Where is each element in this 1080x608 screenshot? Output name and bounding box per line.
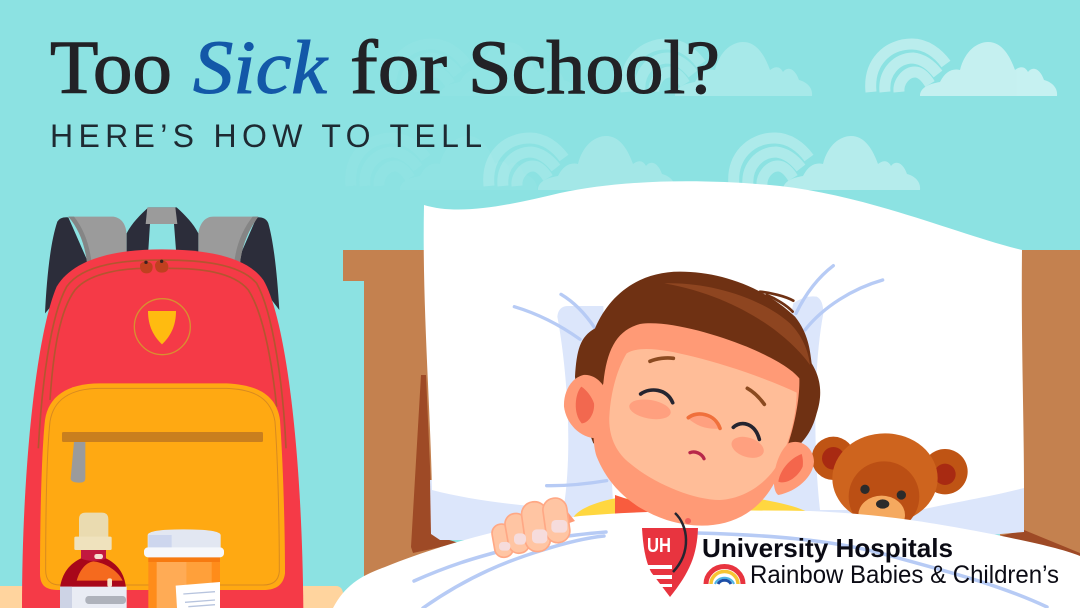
table — [0, 586, 343, 608]
hair highlight — [664, 283, 810, 365]
front pocket — [40, 383, 285, 590]
title: Sick — [193, 26, 328, 110]
left ear — [564, 375, 607, 438]
face — [594, 323, 799, 526]
mouth — [690, 452, 704, 459]
hair tuft — [760, 292, 793, 312]
backpack straps — [45, 207, 279, 313]
hair — [575, 272, 820, 450]
title: Too — [50, 26, 172, 110]
backpack zipper seams — [38, 260, 286, 448]
boy's body and teddy behind the blanket — [514, 266, 968, 534]
logo subtitle: Rainbow Babies & Children’s — [750, 561, 1059, 589]
cheeks — [628, 396, 767, 462]
badge — [134, 299, 190, 355]
backpack — [22, 207, 303, 608]
boy's head — [564, 272, 820, 526]
title — [50, 26, 720, 110]
right ear — [774, 442, 814, 495]
blanket — [333, 511, 1080, 608]
title: for — [350, 26, 447, 110]
UH shield: UH — [647, 535, 671, 557]
UH shield — [640, 513, 698, 597]
pillow shadow behind head — [557, 296, 823, 510]
hand gripping blanket — [491, 497, 575, 559]
subtitle: HERE’S HOW TO TELL — [50, 118, 482, 154]
eyes and eyebrows — [641, 358, 764, 439]
University Hospitals logo — [640, 513, 1059, 597]
logo name: University Hospitals — [702, 533, 953, 563]
zipper pulls — [140, 260, 168, 273]
pill bottle — [144, 529, 224, 608]
background clouds and rainbows — [351, 42, 1057, 190]
pillow crease lines — [514, 266, 883, 486]
nose — [688, 414, 720, 429]
pillow — [424, 181, 1024, 540]
title: School? — [468, 26, 720, 110]
bed frame — [343, 250, 1080, 600]
shirt — [572, 495, 813, 527]
rainbow icon — [706, 567, 743, 584]
backpack body — [22, 249, 303, 608]
blanket fold lines — [414, 532, 1047, 608]
medicine bottle — [60, 513, 127, 608]
inner face — [609, 349, 797, 500]
teddy bear — [812, 433, 968, 534]
